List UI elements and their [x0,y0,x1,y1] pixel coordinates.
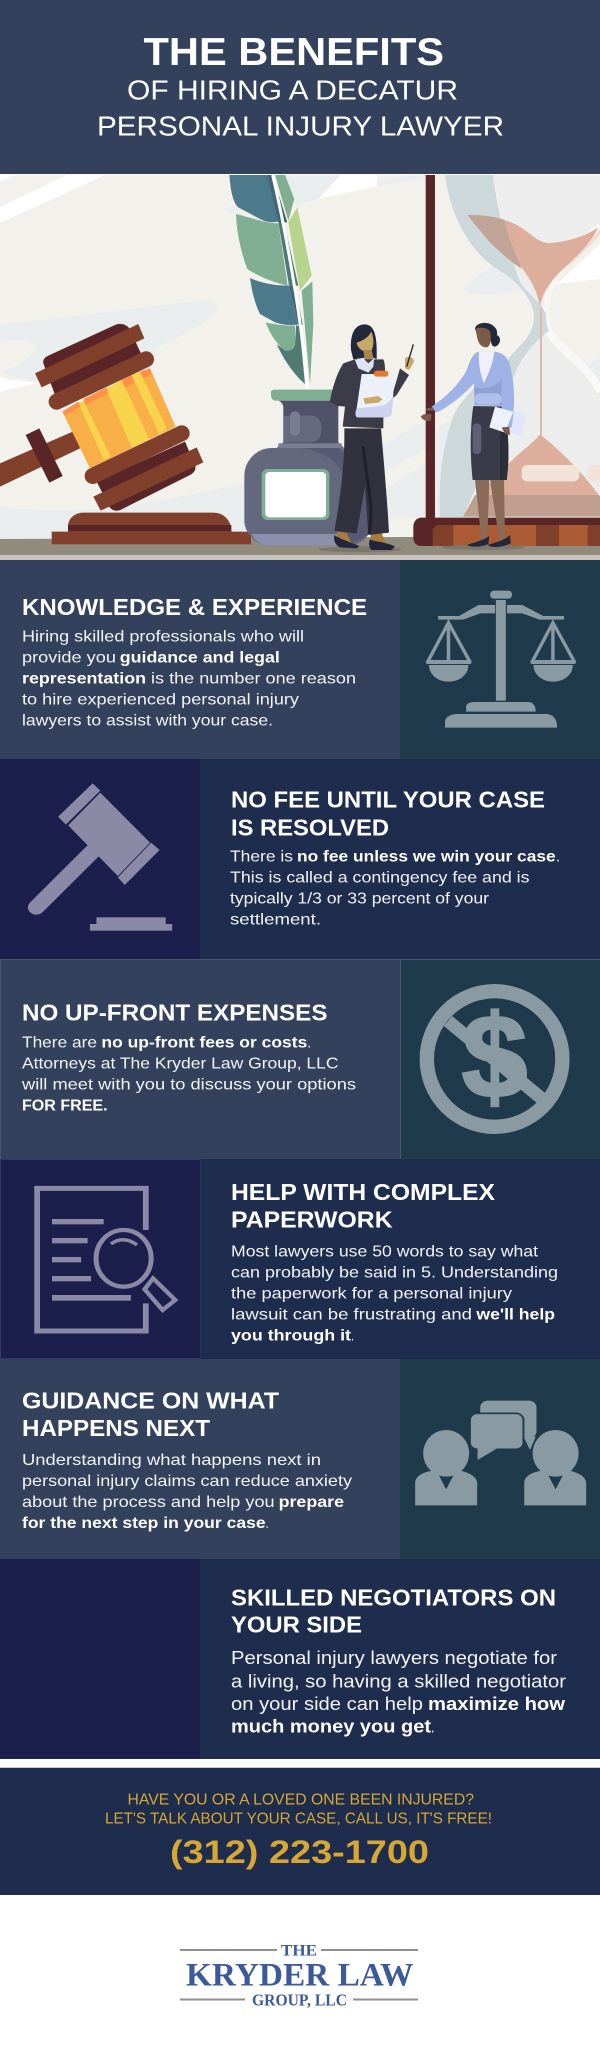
hourglass stand post [426,175,435,520]
body text: . [351,1328,354,1345]
hourglass stand base [413,518,600,546]
body text: about the process and help you [22,1494,275,1511]
body text: provide you [22,650,116,667]
gavel [0,324,203,511]
body text: personal injury claims can reduce anxiety [22,1473,352,1490]
body text: typically 1/3 or 33 percent of your [230,891,490,908]
logo: the kryder law group: THE [281,1943,317,1960]
subtitle line two: PERSONAL INJURY LAWYER [97,111,504,142]
floor shadows [318,545,525,552]
hourglass glass [440,175,600,517]
body text: lawyers to assist with your case. [22,713,273,730]
body text: settlement. [230,912,321,929]
body text: lawsuit can be frustrating and [231,1307,472,1324]
icon: two people talking [415,1401,586,1505]
body text: Attorneys at The Kryder Law Group, LLC [22,1056,338,1073]
body text: you through it [231,1328,352,1345]
icon: no dollar sign: $ [462,991,527,1123]
heading [231,1179,495,1233]
phone number: (312) 223-1700 [170,1834,429,1870]
heading: NO UP-FRONT EXPENSES [22,999,328,1025]
body text: the paperwork for a personal injury [231,1286,512,1303]
body text: prepare [279,1494,344,1511]
background blobs and streaks [0,175,600,539]
body text [231,1244,558,1345]
panel: skilled negotiators [0,1559,600,1759]
body text: . [556,849,560,866]
logo: the kryder law group [180,1943,418,2010]
panel: complex paperwork [0,1159,600,1359]
icon: gavel [36,783,172,931]
body text: Most lawyers use 50 words to say what [231,1244,539,1261]
body text: . [308,1035,311,1052]
heading: HELP WITH COMPLEX [231,1179,495,1205]
body text: representation [22,671,146,688]
body text: for the next step in your case [22,1515,266,1532]
panel: guidance on what happens next [0,1359,600,1559]
feather [229,175,313,388]
body text: we'll help [475,1307,555,1324]
title: the benefits: THE BENEFITS [144,31,444,74]
heading [22,1388,280,1441]
hourglass sand [463,215,600,517]
heading: GUIDANCE ON WHAT [22,1388,280,1414]
body text: Hiring skilled professionals who will [22,629,304,646]
heading: HAPPENS NEXT [22,1415,211,1441]
sound block [52,513,251,544]
ink bottle [244,390,370,546]
body text: FOR FREE. [22,1098,108,1115]
body text: much money you get [231,1717,431,1737]
heading [231,1585,556,1638]
heading: PAPERWORK [231,1207,393,1233]
header: title block [0,0,600,174]
icon: document with magnifier [37,1188,175,1331]
woman with papers [421,323,527,547]
panel: knowledge and experience [0,560,600,759]
icon: no dollar sign [427,991,562,1127]
body text: There is [230,849,293,866]
prompt line one: HAVE YOU OR A LOVED ONE BEEN INJURED? [128,1792,474,1809]
heading: IS RESOLVED [231,814,389,840]
body text: is the number one reason [151,671,356,688]
body text: This is called a contingency fee and is [230,870,530,887]
body text: There are [22,1035,97,1052]
body text [21,1035,356,1115]
call to action banner [0,1767,600,1895]
heading: SKILLED NEGOTIATORS ON [231,1585,556,1611]
heading: KNOWLEDGE & EXPERIENCE [22,594,367,620]
body text [231,1648,566,1737]
floor [0,536,600,556]
body text: . [431,1717,434,1737]
subtitle line one: OF HIRING A DECATUR [127,75,458,106]
body text: Personal injury lawyers negotiate for [231,1648,557,1668]
body text: will meet with you to discuss your options [21,1077,356,1094]
body text: can probably be said in 5. Understanding [231,1265,558,1282]
woman with clipboard [330,324,414,550]
illustration: legal scene [0,175,600,560]
body text: a living, so having a skilled negotiator [231,1671,566,1691]
panel: no up-front expenses [0,960,600,1160]
logo: the kryder law group: GROUP, LLC [252,1991,347,2010]
body text: maximize how [428,1694,566,1714]
icon: scales of justice [426,591,576,728]
body text: Understanding what happens next in [22,1452,321,1469]
body text [22,1452,352,1532]
prompt line two: LET'S TALK ABOUT YOUR CASE, CALL US, IT'S FREE! [105,1811,492,1828]
panel: no fee until resolved [0,759,600,959]
logo: the kryder law group: KRYDER LAW [186,1958,414,1994]
body text: guidance and legal [120,650,280,667]
heading [231,787,545,840]
heading: YOUR SIDE [231,1612,362,1638]
body text: no fee unless we win your case [297,849,556,866]
body text: . [266,1515,269,1532]
body text: no up-front fees or costs [101,1035,307,1052]
heading: NO FEE UNTIL YOUR CASE [231,787,545,813]
body text: on your side can help [231,1694,423,1714]
body text: to hire experienced personal injury [22,692,299,709]
body text [22,629,356,730]
body text [230,849,560,929]
